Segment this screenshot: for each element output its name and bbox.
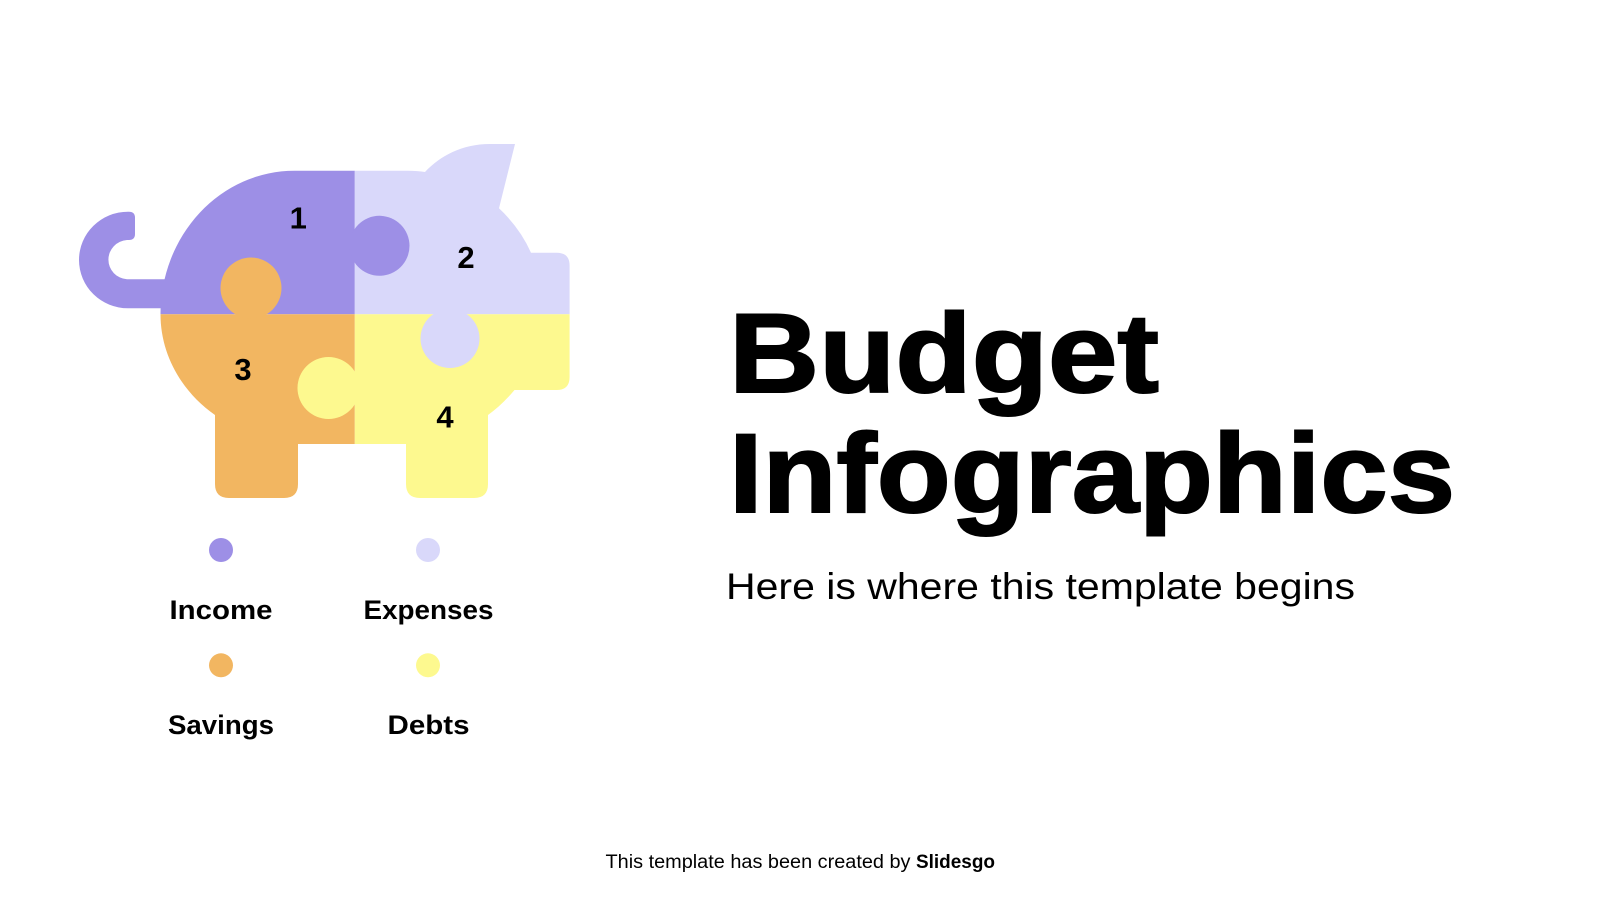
piece 1: income, purple body with tail (79, 171, 355, 314)
piggy bank puzzle illustration (79, 144, 570, 498)
legend item: income: Income (170, 595, 272, 625)
footer credit: Slidesgo (916, 852, 995, 873)
legend item: income (170, 538, 272, 625)
title: Budget (729, 291, 1159, 416)
legend item: expenses: Expenses (364, 595, 494, 625)
footer credit: This template has been created by (606, 852, 911, 873)
number 2: 2 (457, 240, 475, 275)
number 3: 3 (234, 352, 252, 387)
legend item: debts (388, 653, 470, 740)
puzzle tab: orange (220, 258, 282, 318)
legend item: debts: Debts (388, 710, 470, 740)
piece 3: savings, orange rear with leg (160, 314, 355, 498)
subtitle: Here is where this template begins (726, 566, 1355, 607)
legend item: expenses (364, 538, 494, 625)
puzzle tab: lavender (420, 309, 480, 368)
puzzle tab: yellow (298, 357, 360, 419)
number 4: 4 (436, 400, 454, 434)
title: Infographics (729, 411, 1455, 536)
legend (168, 538, 494, 740)
puzzle tab: purple (350, 216, 410, 276)
piece 4: debts, yellow front with leg (355, 314, 570, 498)
legend item: savings: Savings (168, 710, 274, 740)
piece 2: expenses, lavender head with ear and snout (355, 144, 570, 314)
title (729, 291, 1455, 536)
number 1: 1 (290, 200, 307, 236)
legend item: savings (168, 653, 274, 740)
